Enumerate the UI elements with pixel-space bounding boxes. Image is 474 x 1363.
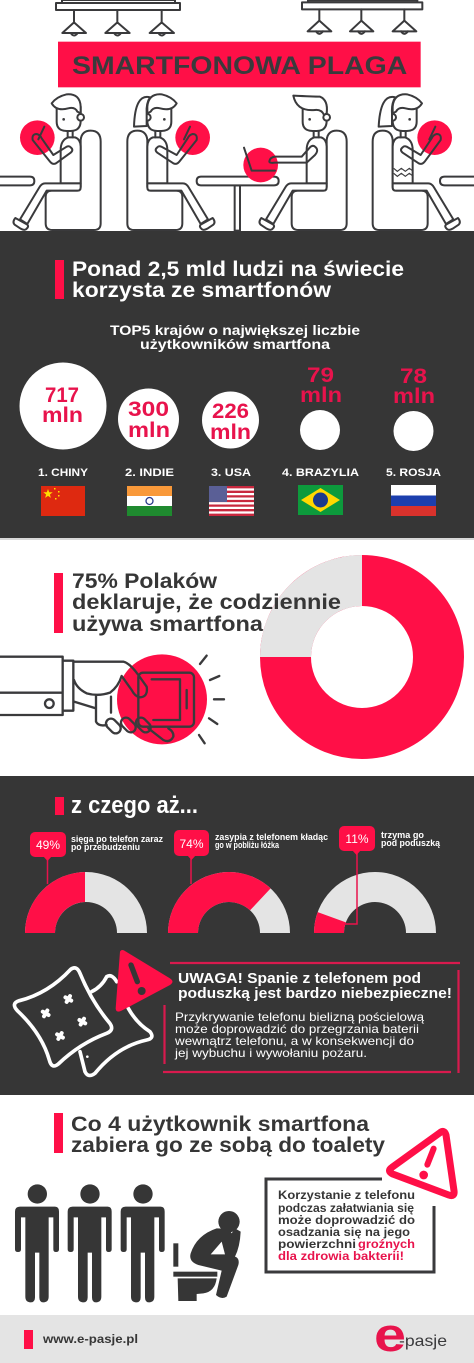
warning box: sleeping with phone: jej wybuchu i wywołaniu pożaru. [174, 1046, 367, 1060]
person 4 [373, 94, 460, 230]
subheading: top 5 countries: użytkowników smartfona [140, 336, 330, 352]
gauge: 11%: 11% [345, 832, 369, 846]
callout: bacteria warning [266, 1179, 434, 1272]
title banner: SMARTFONOWA PLAGA [72, 52, 407, 80]
footer: website and logo: www.e-pasje.pl [42, 1332, 138, 1346]
country: Russia: 5. ROSJA [386, 467, 441, 479]
country: Brazil: 4. BRAZYLIA [282, 467, 359, 479]
country: India: 2. INDIE [125, 467, 174, 479]
warning box: sleeping with phone: wewnątrz telefonu, a w konsekwencji do [174, 1034, 414, 1048]
heading: 75% of Poles [54, 570, 341, 636]
warning box: sleeping with phone: poduszką jest bardzo niebezpieczne! [178, 986, 452, 1002]
country: China [20, 362, 106, 516]
heading: every 4th user: zabiera go ze sobą do toalety [71, 1134, 385, 1157]
country: USA: 226 [212, 400, 249, 423]
heading: 75% of Poles: deklaruje, że codziennie [72, 591, 341, 614]
gauge: 74%: 74% [179, 837, 204, 851]
country: Brazil [282, 364, 359, 515]
gauge: 49%: 49% [36, 838, 60, 852]
illustration: cafe scene with people using phones [0, 0, 474, 231]
country: Russia [386, 365, 441, 516]
country: USA [202, 392, 259, 516]
person 2 [127, 94, 215, 230]
warning box: sleeping with phone: może doprowadzić do przegrzania baterii [175, 1022, 419, 1036]
footer: website and logo: -pasje [399, 1333, 447, 1350]
country: India: mln [128, 419, 170, 442]
heading: z czego aż: z czego aż... [71, 792, 198, 819]
warning box: sleeping with phone: Przykrywanie telefonu bielizną pościelową [175, 1010, 424, 1024]
subheading: top 5 countries: TOP5 krajów o największej liczbie [110, 322, 360, 338]
country: Brazil: mln [300, 384, 342, 407]
country: Russia: 78 [400, 365, 427, 388]
person 1 [13, 94, 101, 230]
heading: 2.5 billion users [55, 258, 404, 302]
donut chart: 75% [260, 555, 438, 734]
lamps left [56, 0, 180, 35]
icon: pillows with warning triangle [14, 950, 172, 1075]
warning box: sleeping with phone: UWAGA! Spanie z telefonem pod [178, 971, 421, 987]
country: China: 717 [45, 384, 79, 407]
gauge: 74%: zasypia z telefonem kładąc [215, 832, 328, 842]
gauge: 74% [168, 830, 328, 933]
country: Russia: mln [393, 385, 435, 408]
heading: 2.5 billion users: Ponad 2,5 mld ludzi na świecie [72, 258, 404, 281]
callout: bacteria warning: groźnych [358, 1239, 415, 1251]
icon: warning triangle outline [389, 1131, 454, 1196]
lamps right [302, 0, 422, 34]
footer: website and logo [24, 1308, 447, 1361]
title banner [58, 42, 421, 87]
gauge: 74%: go w pobliżu łóżka [215, 840, 280, 850]
country: Brazil: 79 [307, 364, 334, 387]
gauge: 49% [25, 832, 163, 933]
country: USA: mln [210, 421, 251, 444]
callout: bacteria warning: dla zdrowia bakterii! [278, 1251, 404, 1263]
heading: 75% of Poles: używa smartfona [72, 613, 263, 636]
callout: bacteria warning: Korzystanie z telefonu [278, 1190, 415, 1202]
gauge: 49%: sięga po telefon zaraz [71, 834, 163, 844]
icon: hand holding phone [0, 654, 224, 744]
gauge: 11%: pod poduszką [381, 838, 441, 848]
heading: every 4th user [54, 1113, 385, 1157]
person 3 with laptop [197, 96, 347, 230]
country: USA: 3. USA [211, 467, 251, 479]
gauge: 11% [314, 826, 441, 933]
heading: 75% of Poles: 75% Polaków [72, 570, 218, 593]
callout: bacteria warning: powierzchni [278, 1239, 356, 1251]
footer: website and logo: e [374, 1308, 406, 1361]
country: China: 1. CHINY [38, 467, 89, 479]
subheading: top 5 countries [110, 322, 360, 352]
tables [0, 177, 474, 231]
heading: every 4th user: Co 4 użytkownik smartfona [71, 1113, 369, 1136]
callout: bacteria warning: osadzania się na jego [278, 1227, 410, 1239]
gauge: 11%: trzyma go [381, 830, 425, 840]
heading: 2.5 billion users: korzysta ze smartfonów [72, 279, 332, 302]
warning box: sleeping with phone [163, 963, 460, 1073]
gauge: 49%: po przebudzeniu [71, 842, 140, 852]
callout: bacteria warning: może doprowadzić do [278, 1215, 415, 1227]
country: China: mln [42, 404, 83, 427]
callout: bacteria warning: podczas załatwiania się [278, 1203, 414, 1215]
country: India [118, 388, 179, 516]
icon: three standing people and one on toilet [15, 1184, 241, 1302]
country: India: 300 [128, 398, 169, 421]
